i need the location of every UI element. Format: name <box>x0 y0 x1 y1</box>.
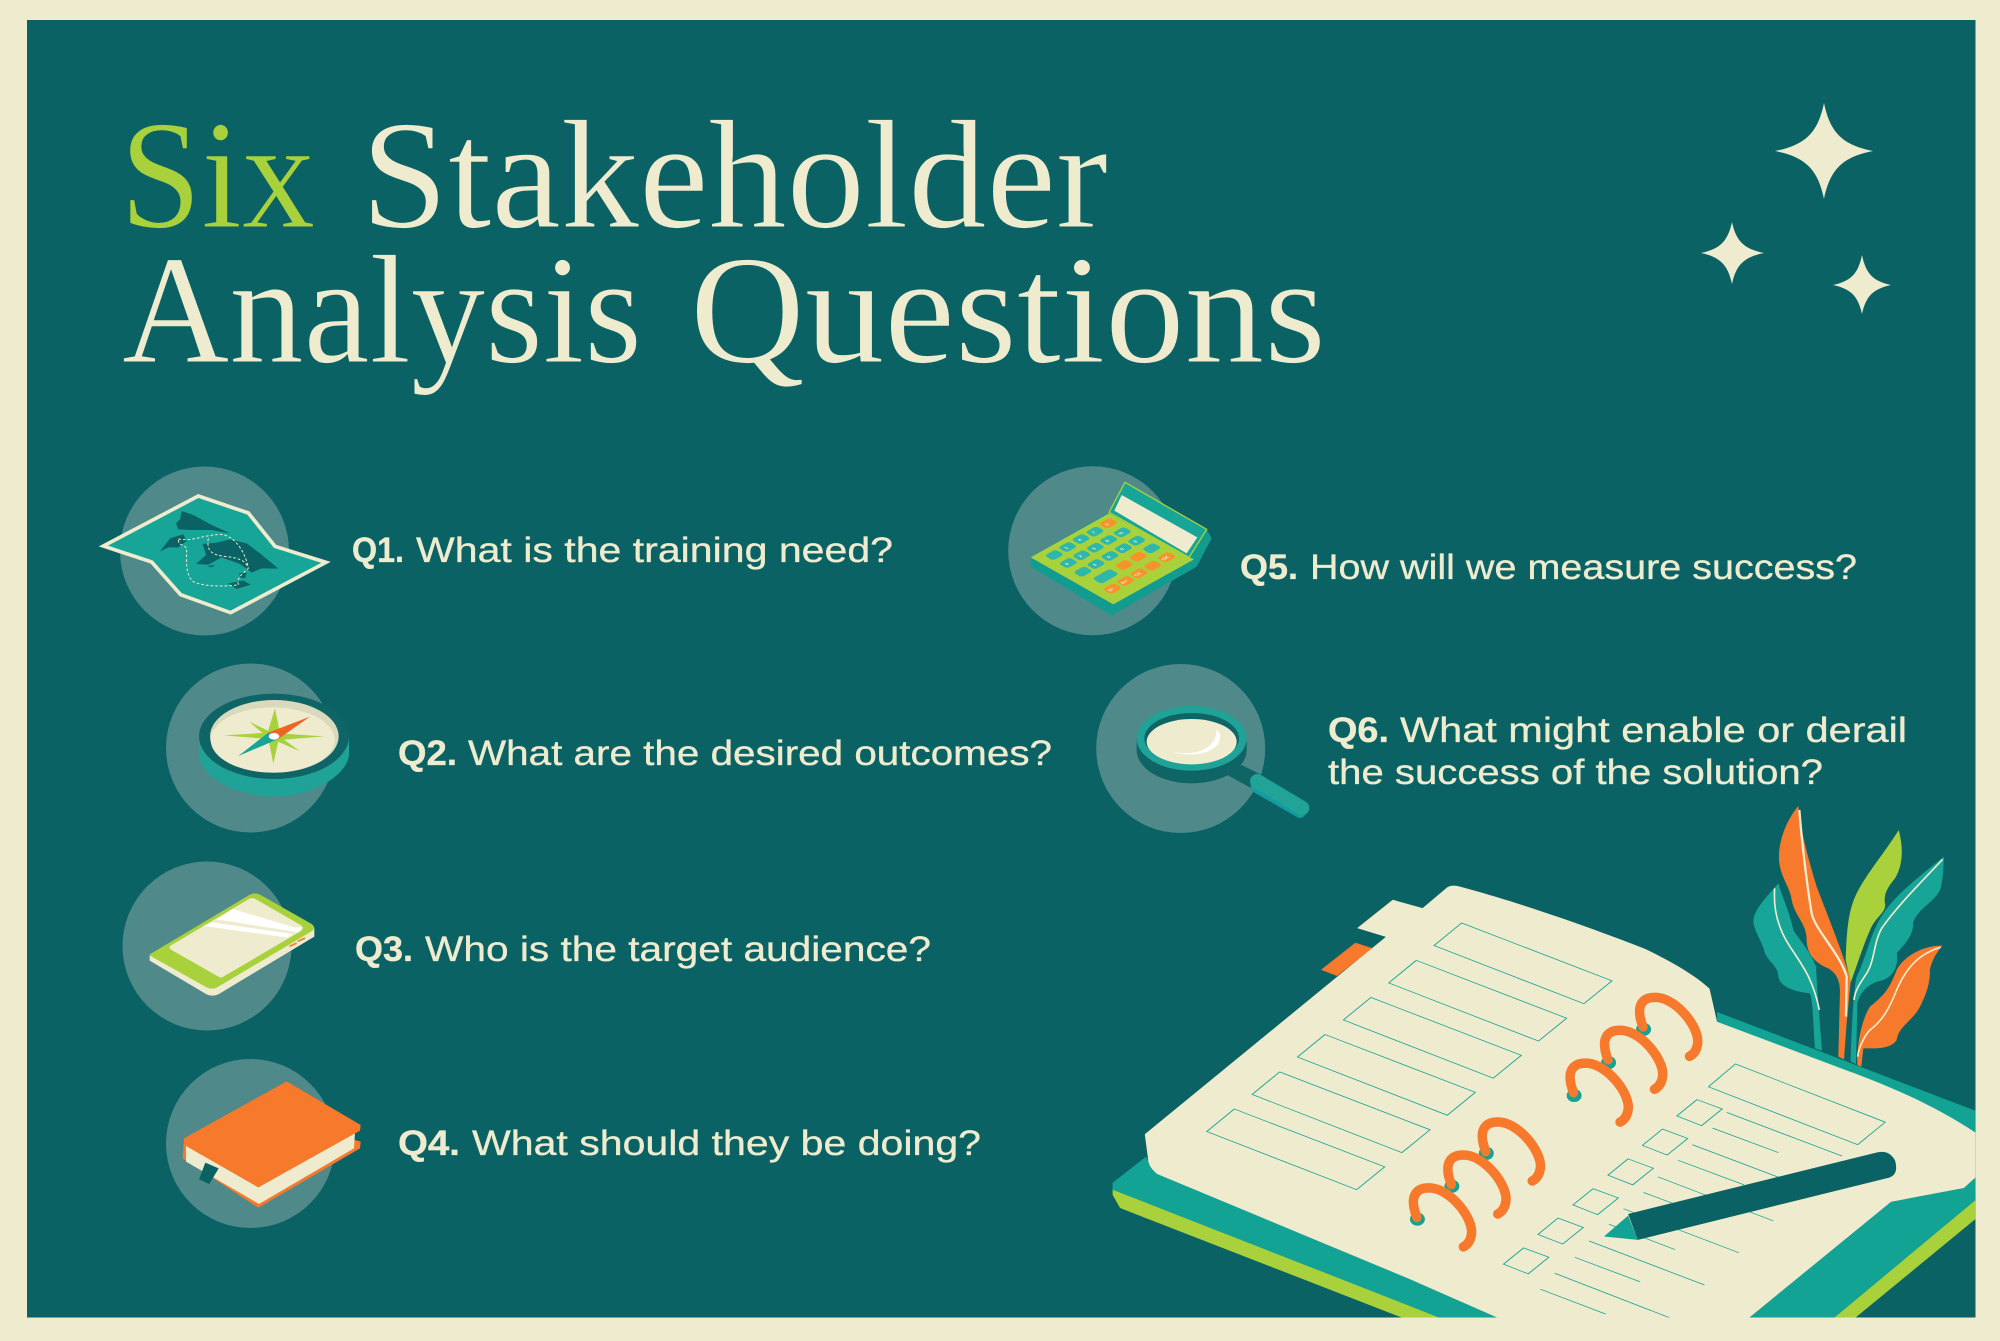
icon: calculator: 0 <box>1064 562 1071 566</box>
icon: calculator: 5 <box>1091 546 1098 550</box>
icon: plant leaves <box>1753 806 1944 1067</box>
question 1 text: Q1. <box>352 531 404 570</box>
icon: calculator: 7 <box>1090 530 1097 534</box>
question 1 text: What is the training need? <box>416 531 893 570</box>
icon: sparkle stars <box>1701 103 1891 314</box>
title: Six <box>120 89 315 261</box>
icon: calculator <box>1031 482 1212 616</box>
notebook pages <box>1145 886 1975 1320</box>
icon: calculator: % <box>1117 531 1126 536</box>
orange tab <box>1321 943 1373 976</box>
question 3 <box>122 862 931 1030</box>
spiral rings <box>1410 997 1698 1247</box>
question 6 text <box>1328 711 1907 792</box>
icon: world map <box>103 496 326 613</box>
checklist <box>1504 1100 1842 1318</box>
question 4 <box>166 1059 981 1228</box>
icon: calculator: 1 <box>1063 546 1070 550</box>
icon: calculator: 4 <box>1076 538 1083 542</box>
icon: calculator: OK <box>1160 555 1171 561</box>
form fields <box>1207 923 1885 1190</box>
notebook cover <box>1113 1012 1975 1320</box>
illustration: open planner notebook <box>1113 886 1975 1320</box>
icon: calculator: 9 <box>1119 547 1126 551</box>
icon: calculator: 9 <box>1132 539 1139 543</box>
icon: calculator: CE <box>1133 571 1143 577</box>
question 5 <box>1008 466 1857 635</box>
icon: calculator: M+ <box>1119 579 1130 585</box>
title: Analysis <box>122 224 642 396</box>
title: Stakeholder <box>361 89 1108 261</box>
question 2 text: What are the desired outcomes? <box>468 734 1052 773</box>
question 6 <box>1096 664 1907 833</box>
question 2 <box>166 664 1052 832</box>
question 6 text: Q6. <box>1328 711 1389 750</box>
icon: calculator: 3 <box>1091 563 1098 567</box>
title: Questions <box>690 224 1326 396</box>
icon: closed book <box>183 1081 361 1208</box>
question 1 <box>103 466 893 636</box>
pencil <box>1604 1152 1896 1240</box>
question 4 text: Q4. <box>398 1124 460 1163</box>
question 4 text: What should they be doing? <box>472 1124 981 1163</box>
question 6 text: the success of the solution? <box>1328 753 1823 792</box>
icon: calculator: 8 <box>1104 539 1111 543</box>
question 2 text: Q2. <box>398 734 457 773</box>
question 3 text: Who is the target audience? <box>425 930 931 969</box>
title <box>120 89 1326 396</box>
icon: calculator: 2 <box>1077 554 1084 558</box>
icon: smartphone <box>150 893 314 996</box>
question 5 text: Q5. <box>1240 548 1298 587</box>
icon: magnifying glass <box>1137 706 1302 813</box>
icon: compass <box>199 694 349 797</box>
icon: calculator: C <box>1103 522 1111 526</box>
question 3 text: Q3. <box>355 930 413 969</box>
icon: calculator: 6 <box>1105 555 1112 559</box>
question 6 text: What might enable or derail <box>1400 711 1907 750</box>
question 5 text: How will we measure success? <box>1310 548 1857 587</box>
icon: calculator: M- <box>1107 587 1116 592</box>
